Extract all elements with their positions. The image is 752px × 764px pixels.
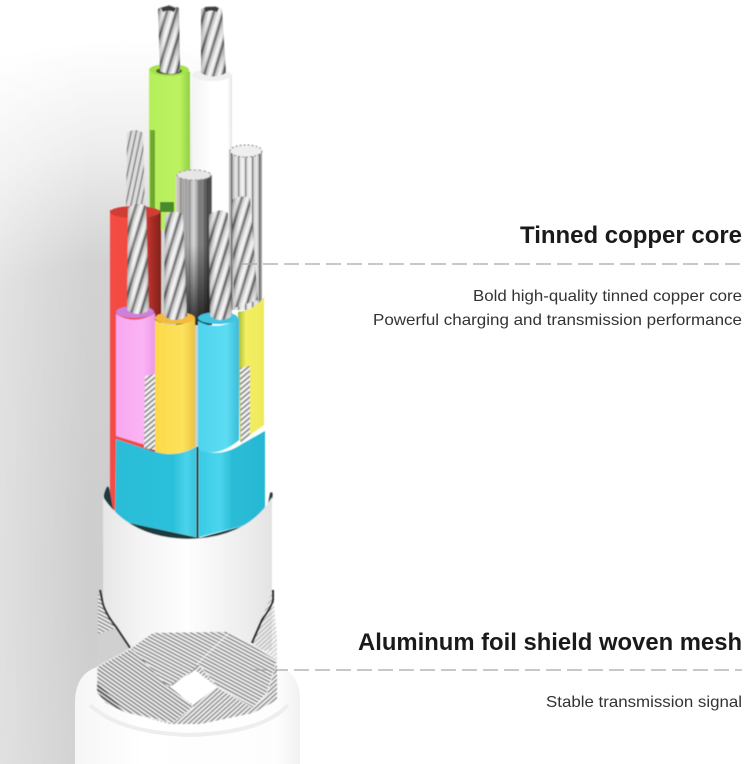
centre dark core	[176, 170, 212, 325]
cyan wire	[198, 312, 239, 452]
leader line: aluminum foil shield	[252, 669, 742, 671]
green stub shadow	[160, 202, 174, 212]
yellow strand	[164, 212, 187, 320]
lime strand	[232, 196, 258, 308]
sleeve inner rim	[104, 487, 273, 540]
cyan strand	[209, 210, 232, 320]
woven mesh shield	[97, 590, 277, 724]
white jacket	[75, 667, 300, 764]
red wire	[110, 206, 161, 510]
small strand left	[144, 374, 155, 450]
description: aluminum foil shield: Stable transmission signal	[546, 694, 742, 711]
heading: tinned copper core: Tinned copper core	[520, 222, 742, 249]
pink strand	[127, 204, 149, 314]
rear thin strand	[126, 130, 145, 212]
white sleeve	[103, 497, 272, 650]
description: tinned copper core	[373, 288, 742, 329]
wires and core	[103, 5, 273, 650]
cyan sheath right	[199, 431, 265, 537]
rear flat-cut strand	[229, 145, 262, 310]
white wire with strand	[192, 6, 232, 304]
sheath divider	[196, 447, 198, 539]
cyan sheath left	[115, 439, 196, 537]
description: tinned copper core: Powerful charging and transmission performance	[373, 312, 742, 329]
pink wire	[116, 306, 155, 448]
leader line: tinned copper core	[242, 263, 742, 265]
lime wire	[238, 297, 264, 442]
heading: aluminum foil shield woven mesh: Aluminum foil shield woven mesh	[358, 629, 742, 656]
cable illustration	[75, 5, 300, 764]
yellow wire	[155, 312, 195, 454]
green wire with strand	[149, 5, 190, 230]
description: tinned copper core: Bold high-quality tinned copper core	[473, 288, 742, 305]
small strand right	[240, 366, 250, 444]
